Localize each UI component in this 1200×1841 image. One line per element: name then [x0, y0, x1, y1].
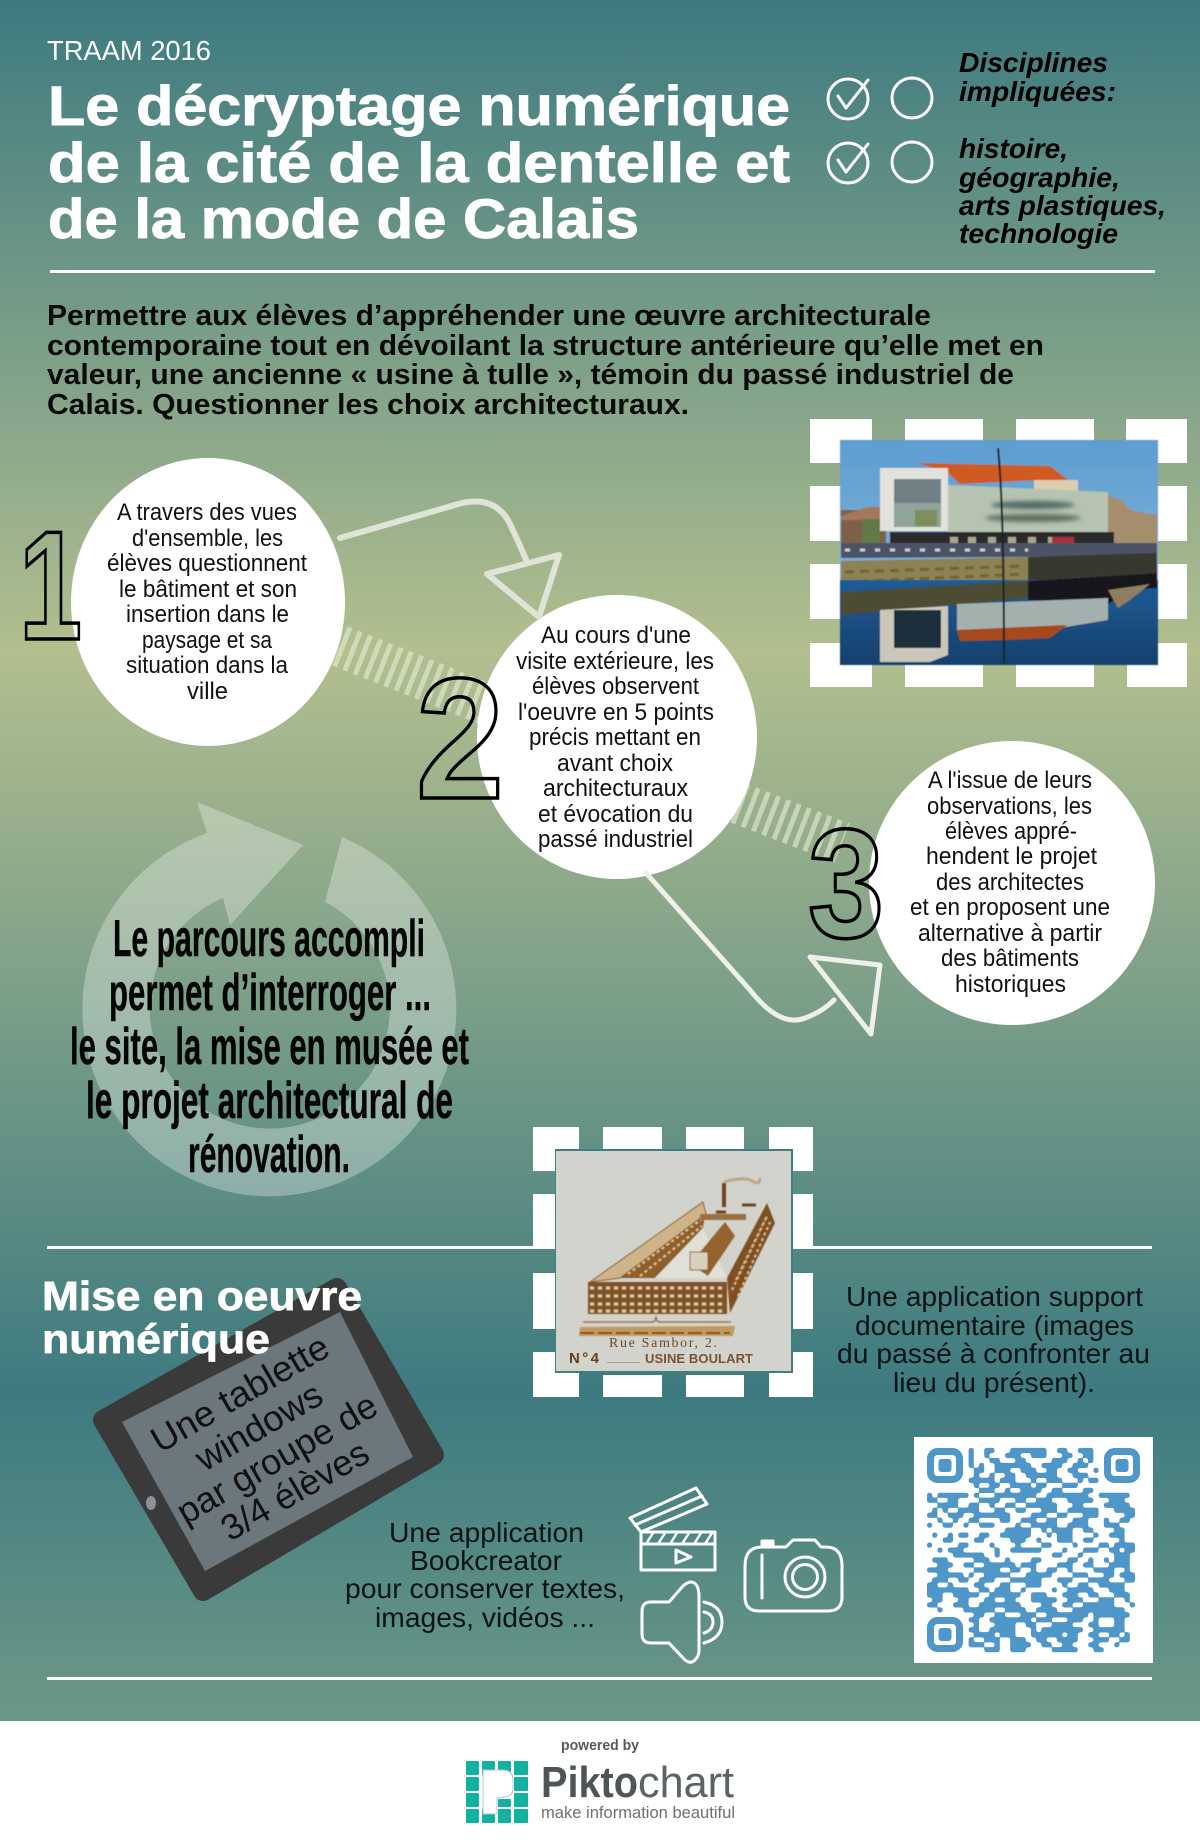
step 1 circle: paysage et sa	[142, 627, 273, 654]
Piktochart wordmark: Pikto	[541, 1758, 638, 1807]
step 1 circle: le bâtiment et son	[119, 576, 297, 603]
text: application Bookcreator: Bookcreator	[410, 1545, 562, 1576]
tablet text: 3/4 élèves	[213, 1431, 376, 1549]
QR code	[914, 1437, 1153, 1663]
step 1 circle: insertion dans le	[126, 601, 289, 628]
step 3 circle: alternative à partir	[918, 920, 1102, 947]
step 3 circle: hendent le projet	[926, 843, 1097, 870]
central statement: permet d’interroger ...	[109, 964, 431, 1022]
icon: speaker	[642, 1582, 722, 1662]
step 2 circle: passé industriel	[538, 826, 693, 853]
central statement: le projet architectural de	[86, 1072, 453, 1130]
step 3 circle	[869, 741, 1155, 1025]
step 1 circle: d'ensemble, les	[132, 525, 283, 552]
step 3 circle: historiques	[955, 971, 1066, 998]
text: application Bookcreator	[345, 1517, 625, 1633]
icon: clapperboard	[630, 1488, 715, 1570]
step 2 circle: élèves observent	[532, 673, 699, 700]
powered by: powered by	[561, 1737, 640, 1754]
step 1 circle: élèves questionnent	[107, 550, 307, 577]
heading: mise en oeuvre numérique: numérique	[42, 1316, 270, 1362]
heading: mise en oeuvre numérique: Mise en oeuvre	[42, 1273, 362, 1319]
number 2: 2	[416, 643, 504, 835]
tablet text: windows	[187, 1373, 330, 1479]
text: application support: du passé à confronter au	[837, 1338, 1150, 1369]
step 2 circle: précis mettant en	[529, 724, 701, 751]
disciplines list: impliquées:	[959, 76, 1116, 107]
intro paragraph	[47, 300, 1044, 421]
step 2 circle: avant choix	[557, 750, 673, 777]
number 1: 1	[19, 499, 82, 672]
step 3 circle: élèves appré-	[945, 818, 1077, 845]
heading: mise en oeuvre numérique	[42, 1273, 362, 1362]
photo panel: modern museum building	[810, 419, 1187, 687]
icon: camera	[745, 1540, 842, 1611]
intro paragraph: contemporaine tout en dévoilant la structure antérieure qu’elle met en	[47, 330, 1044, 362]
arrow: step 1 to step 2	[340, 502, 559, 617]
text: application Bookcreator: Une application	[389, 1517, 584, 1548]
title: Le décryptage numérique	[48, 74, 790, 137]
step 2 circle: et évocation du	[538, 801, 693, 828]
tagline: make information beautiful	[541, 1803, 735, 1822]
text: application Bookcreator: images, vidéos ...	[375, 1602, 595, 1633]
photo panel: old factory engraving: N°4	[569, 1350, 600, 1367]
subtitle: TRAAM 2016: TRAAM 2016	[47, 35, 211, 66]
step 3 circle: des architectes	[936, 869, 1084, 896]
disciplines list: Disciplines	[959, 47, 1108, 78]
tablet text: par groupe de	[169, 1384, 384, 1532]
stripe connector: step 1 to step 2	[340, 646, 486, 704]
photo panel: old factory engraving	[533, 1127, 813, 1397]
central statement: Le parcours accompli	[113, 910, 425, 968]
central statement: le site, la mise en musée et	[70, 1018, 469, 1076]
text: application support: documentaire (images	[855, 1310, 1134, 1341]
step 2 circle: visite extérieure, les	[516, 648, 714, 675]
intro paragraph: Permettre aux élèves d’appréhender une œuvre architecturale	[47, 300, 931, 332]
icon: tablet	[103, 1288, 434, 1591]
disciplines list: technologie	[959, 218, 1118, 249]
step 2 circle: architecturaux	[543, 775, 688, 802]
disciplines list: géographie,	[958, 162, 1120, 193]
step 1 circle: situation dans la	[126, 652, 289, 679]
step 3 circle: A l'issue de leurs	[928, 767, 1092, 794]
tablet text: Une tablette	[143, 1326, 336, 1461]
disciplines list: arts plastiques,	[959, 190, 1166, 221]
icon: circular arrows	[82, 802, 456, 1196]
title	[48, 74, 790, 250]
text: application support: Une application support	[846, 1281, 1143, 1312]
text: application Bookcreator: pour conserver textes,	[345, 1573, 625, 1604]
Piktochart wordmark	[541, 1758, 734, 1807]
disciplines list: histoire,	[959, 133, 1068, 164]
step 3 circle: des bâtiments	[941, 945, 1079, 972]
icon: checklist circles	[828, 78, 932, 183]
title: de la cité de la dentelle et	[48, 131, 790, 194]
title: de la mode de Calais	[48, 187, 639, 250]
footer	[0, 1721, 1200, 1841]
Piktochart logo mark	[466, 1761, 528, 1823]
step 2 circle: l'oeuvre en 5 points	[518, 699, 714, 726]
step 2 circle: Au cours d'une	[541, 622, 691, 649]
number 3: 3	[808, 797, 884, 970]
text: application support: lieu du présent).	[893, 1367, 1095, 1398]
step 1 circle	[71, 458, 345, 746]
text: application support	[837, 1281, 1150, 1398]
Piktochart wordmark: chart	[638, 1758, 734, 1807]
step 1 circle: ville	[187, 678, 228, 705]
arrow: step 2 to step 3	[646, 873, 880, 1034]
tablet text	[143, 1326, 384, 1549]
intro paragraph: Calais. Questionner les choix architecturaux.	[47, 389, 689, 421]
stripe connector: step 2 to step 3	[738, 803, 842, 843]
step 1 circle: A travers des vues	[117, 499, 297, 526]
central statement	[70, 910, 469, 1184]
photo panel: old factory engraving: Rue Sambor, 2.	[609, 1336, 717, 1351]
step 3 circle: et en proposent une	[910, 894, 1110, 921]
step 2 circle	[477, 595, 757, 879]
intro paragraph: valeur, une ancienne « usine à tulle », témoin du passé industriel de	[47, 359, 1014, 391]
step 3 circle: observations, les	[927, 793, 1092, 820]
photo panel: old factory engraving: USINE BOULART	[645, 1351, 753, 1366]
disciplines list	[958, 47, 1166, 249]
central statement: rénovation.	[188, 1126, 350, 1184]
